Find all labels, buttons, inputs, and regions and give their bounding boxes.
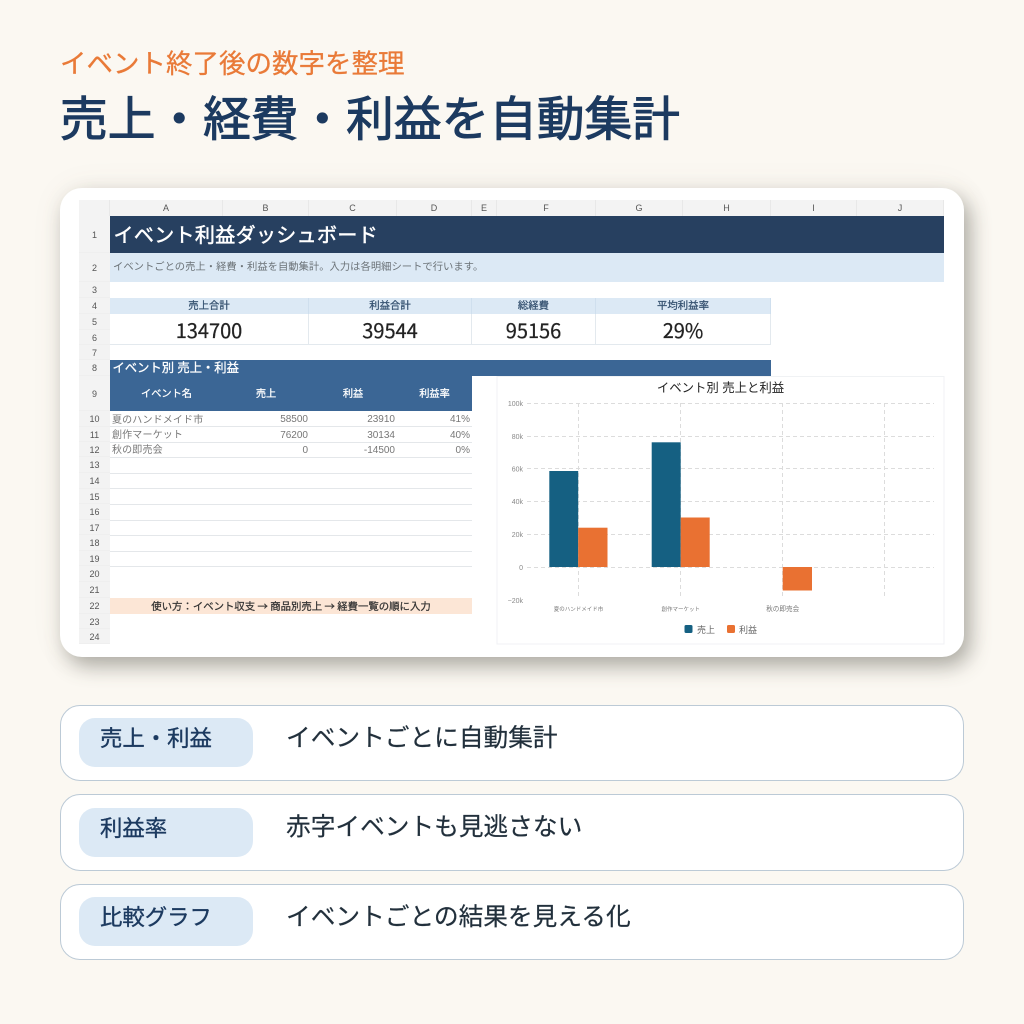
- column headers: E: [481, 203, 487, 213]
- table: 利益: [343, 389, 363, 400]
- row headers: 20: [89, 569, 100, 579]
- bars: profit: [578, 518, 812, 590]
- column headers: H: [723, 203, 730, 213]
- row headers: 11: [90, 430, 99, 440]
- KPI summary: 総経費: [518, 301, 549, 312]
- bars: sales: [549, 442, 681, 567]
- panel: comparison graph: [60, 884, 964, 960]
- table: 秋の即売会: [112, 445, 163, 456]
- section bar: イベント別 売上・利益: [112, 361, 239, 375]
- y axis labels: 80k: [512, 434, 523, 441]
- row headers: 22: [89, 601, 100, 611]
- row headers: 17: [89, 523, 100, 533]
- table: イベント名: [141, 389, 192, 400]
- x axis labels: 創作マーケット: [661, 605, 700, 613]
- y axis labels: 40k: [512, 499, 523, 506]
- y axis labels: −20k: [508, 598, 523, 605]
- description: イベントごとに自動集計: [286, 718, 558, 754]
- y axis labels: [508, 401, 523, 605]
- table: 76200: [280, 430, 308, 440]
- panel: spreadsheet card: [60, 188, 964, 657]
- pill: 比較グラフ: [100, 900, 212, 932]
- KPI summary: 134700: [176, 315, 242, 344]
- KPI summary: [110, 298, 771, 345]
- description bar: [110, 253, 944, 282]
- dashboard title bar: イベント利益ダッシュボード: [114, 225, 378, 247]
- row headers: 2: [92, 263, 97, 273]
- row headers: 14: [89, 476, 100, 486]
- table: 利益率: [419, 389, 450, 400]
- KPI summary: 平均利益率: [657, 301, 709, 312]
- pill: [79, 808, 253, 856]
- y axis labels: 60k: [512, 466, 523, 474]
- table: 23910: [367, 414, 395, 425]
- table: -14500: [364, 445, 395, 456]
- table: 夏のハンドメイド市: [112, 414, 203, 426]
- column headers: F: [543, 203, 549, 213]
- subtitle: イベント終了後の数字を整理: [60, 42, 404, 81]
- row headers: 9: [92, 389, 97, 399]
- title: 売上・経費・利益を自動集計: [60, 81, 680, 150]
- row headers: 1: [92, 230, 97, 240]
- description: 赤字イベントも見逃さない: [286, 807, 582, 843]
- table: 売上: [256, 389, 276, 400]
- x axis labels: [554, 604, 800, 613]
- table: 創作マーケット: [112, 430, 183, 441]
- row headers: 3: [92, 285, 97, 295]
- column headers: D: [431, 203, 437, 213]
- table: 30134: [367, 430, 395, 440]
- row headers: 5: [92, 317, 97, 327]
- row headers: [79, 216, 110, 644]
- table: 58500: [280, 414, 308, 425]
- row headers: 10: [89, 414, 100, 424]
- panel: profit rate: [60, 794, 964, 870]
- table: 0: [302, 445, 308, 456]
- row headers: 15: [89, 492, 100, 502]
- row headers: 24: [89, 632, 100, 642]
- pill: [79, 718, 253, 767]
- panel: sales and profit: [60, 704, 964, 781]
- row headers: 21: [89, 585, 100, 595]
- description: イベントごとの結果を見える化: [286, 896, 631, 932]
- row headers: 12: [89, 445, 100, 455]
- x axis labels: 夏のハンドメイド市: [554, 605, 604, 613]
- x axis labels: 秋の即売会: [766, 604, 800, 613]
- KPI summary: 95156: [506, 315, 561, 344]
- KPI summary: 利益合計: [369, 301, 411, 312]
- row headers: 8: [92, 363, 97, 373]
- dashboard title bar: [110, 216, 944, 253]
- column headers: J: [898, 203, 902, 213]
- table: 41%: [450, 414, 470, 425]
- column headers: G: [635, 203, 642, 213]
- pill: [79, 897, 253, 946]
- column headers: A: [163, 203, 169, 213]
- row headers: 13: [89, 460, 100, 470]
- table: [110, 376, 472, 567]
- y axis labels: 20k: [512, 532, 523, 539]
- legend: 売上: [697, 624, 715, 635]
- column headers: C: [349, 203, 356, 213]
- y axis labels: 0: [519, 565, 523, 572]
- description bar: イベントごとの売上・経費・利益を自動集計。入力は各明細シートで行います。: [113, 262, 483, 273]
- section bar: [110, 360, 771, 376]
- column headers: [79, 200, 944, 216]
- row headers: 18: [89, 538, 100, 548]
- KPI summary: 39544: [362, 315, 418, 344]
- KPI summary: 29%: [663, 315, 703, 344]
- how-to bar: 使い方：イベント収支 → 商品別売上 → 経費一覧の順に入力: [151, 598, 431, 613]
- legend: 利益: [739, 624, 757, 635]
- row headers: 23: [89, 617, 100, 627]
- row headers: 7: [92, 348, 97, 358]
- row headers: 4: [92, 301, 97, 311]
- y axis labels: 100k: [508, 401, 523, 408]
- spreadsheet: [79, 200, 944, 644]
- chart title: イベント別 売上と利益: [657, 380, 785, 395]
- table: 40%: [450, 430, 470, 440]
- column headers: I: [812, 203, 815, 213]
- KPI summary: 売上合計: [188, 301, 230, 312]
- row headers: 16: [89, 507, 100, 517]
- table: 0%: [456, 445, 470, 456]
- column headers: B: [262, 203, 268, 213]
- pill: 利益率: [100, 810, 167, 842]
- legend: [684, 624, 757, 635]
- row headers: 19: [89, 554, 100, 564]
- pill: 売上・利益: [100, 721, 212, 753]
- row headers: 6: [92, 333, 97, 343]
